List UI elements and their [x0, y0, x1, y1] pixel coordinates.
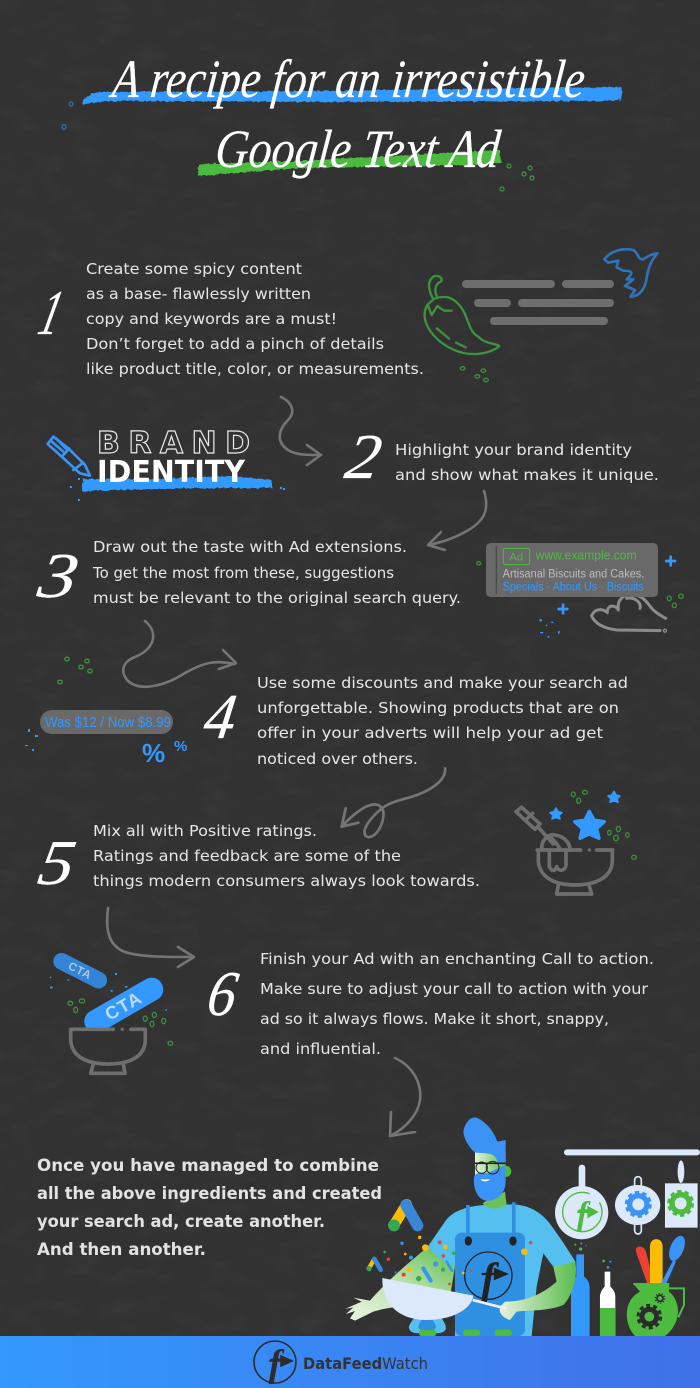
closing text: Once you have managed to combine [37, 1155, 379, 1175]
ad example card [477, 543, 683, 638]
title line 2: Google Text Ad [213, 119, 504, 179]
number 4: 4 [200, 681, 241, 752]
left arm [345, 1247, 455, 1321]
step 4 text [257, 674, 628, 768]
arrow: step 4 to 5 [342, 768, 445, 837]
flying ingredients [383, 1236, 532, 1285]
step 2 text [395, 441, 659, 484]
gear board [665, 1160, 698, 1228]
icon: bowl, whisk and stars [516, 790, 636, 894]
step 6 text [260, 950, 654, 1058]
apron [455, 1233, 525, 1336]
bottles [571, 1242, 615, 1336]
step 1 text: like product title, color, or measurements. [86, 360, 424, 378]
arrow: step 1 to 2 [280, 397, 321, 465]
utensils in jug [627, 1233, 688, 1336]
step 4 text: Use some discounts and make your search ad [257, 674, 628, 692]
step 1 text: copy and keywords are a must! [86, 310, 337, 328]
step 5 text: Mix all with Positive ratings. [93, 822, 317, 840]
step 5 text: Ratings and feedback are some of the [93, 847, 401, 865]
step 6 text: ad so it always flows. Make it short, snappy, [260, 1010, 609, 1028]
head [475, 1152, 506, 1177]
kitchen rail and hanging utensils [555, 1149, 700, 1239]
icon: marker [48, 437, 90, 476]
icon: chili pepper [425, 276, 499, 382]
step 1 text [86, 260, 424, 378]
step 4 text: unforgettable. Showing products that are on [257, 699, 619, 717]
number 1: 1 [32, 278, 70, 349]
icon: dove [604, 249, 657, 297]
footer logo: f [269, 1343, 285, 1385]
step 3 [32, 538, 683, 638]
footer logo [254, 1341, 296, 1385]
gear spatula [615, 1177, 660, 1234]
ad url: www.example.com [535, 548, 637, 562]
arrow: step 6 to closing [390, 1058, 420, 1136]
step 2 [341, 421, 659, 492]
number 6: 6 [203, 958, 243, 1029]
specks [70, 478, 285, 501]
footer wordmark: DataFeedWatch [303, 1354, 428, 1373]
IDENTITY text: IDENTITY [97, 455, 246, 490]
ad extensions: Specials · About Us · Biscuits [503, 579, 644, 593]
ad label: Ad [509, 551, 523, 563]
wok [382, 1278, 507, 1320]
sparkles [559, 557, 675, 613]
step 6 text: Make sure to adjust your call to action with your [260, 980, 649, 998]
brand identity graphic [48, 426, 285, 501]
arrow: step 2 to 3 [428, 491, 486, 550]
step 4 text: noticed over others. [257, 750, 418, 768]
step 3 text [92, 538, 461, 607]
step 1 [32, 249, 657, 382]
flame [409, 1312, 446, 1336]
icon: Google Ads logo small [366, 1259, 381, 1271]
pan with logo: f [577, 1196, 591, 1233]
closing text: all the above ingredients and created [37, 1183, 382, 1203]
percent icons [142, 738, 187, 768]
step 1 text: Create some spicy content [86, 260, 302, 278]
closing text: And then another. [37, 1239, 206, 1259]
footer band [0, 1336, 700, 1388]
step 2 text: and show what makes it unique. [395, 466, 659, 484]
discount pill: Was $12 / Now $8.99 [45, 714, 171, 731]
title line 1: A recipe for an irresistible [107, 49, 588, 109]
closing text [37, 1155, 382, 1259]
chef illustration [345, 1117, 700, 1336]
closing text: your search ad, create another. [37, 1211, 325, 1231]
step 4 text: offer in your adverts will help your ad get [257, 724, 603, 742]
card [486, 543, 658, 597]
step 5 text [93, 822, 480, 890]
title brush stroke: blue [82, 87, 622, 105]
step 6 [50, 950, 654, 1073]
icon: hand [592, 595, 666, 631]
discount pill [40, 710, 173, 734]
step 5 text: things modern consumers always look towards. [93, 872, 480, 890]
step 3 text: To get the most from these, suggestions [92, 564, 394, 582]
right arm [500, 1262, 576, 1320]
specks [25, 657, 92, 751]
icon: Google Ads logo large [388, 1204, 418, 1231]
step 3 text: Draw out the taste with Ad extensions. [93, 538, 407, 556]
number 2: 2 [341, 421, 387, 492]
step 1 text: as a base- flawlessly written [86, 285, 311, 303]
BRAND outline text: BRAND [97, 426, 250, 461]
percent icons: % [142, 738, 165, 768]
arrow: step 3 to 4 [123, 621, 236, 687]
title specks [62, 102, 534, 191]
pan with logo [555, 1165, 608, 1239]
step 5 [34, 790, 636, 898]
icon: CTA bowl [50, 950, 173, 1073]
neck [483, 1192, 507, 1209]
shirt [427, 1204, 576, 1336]
percent icons: % [174, 738, 187, 755]
chef body: f [481, 1255, 500, 1303]
arrow: step 5 to 6 [107, 908, 194, 967]
large CTA pill: CTA [101, 987, 146, 1024]
step 4 [25, 657, 628, 768]
small CTA pill: CTA [66, 960, 93, 982]
brush stroke [82, 476, 272, 491]
number 3: 3 [32, 540, 84, 611]
step 6 text: and influential. [260, 1040, 381, 1058]
step 3 text: must be relevant to the original search query. [93, 589, 461, 607]
chef body [345, 1117, 576, 1336]
step 1 text: Don’t forget to add a pinch of details [86, 335, 384, 353]
title [62, 49, 622, 191]
bowl [69, 1029, 147, 1049]
ad description: Artisanal Biscuits and Cakes. [503, 566, 644, 580]
icon: text lines [462, 280, 614, 325]
number 5: 5 [34, 827, 81, 898]
step 6 text: Finish your Ad with an enchanting Call to action. [260, 950, 654, 968]
step 2 text: Highlight your brand identity [395, 441, 632, 459]
title brush stroke: green [198, 150, 501, 176]
